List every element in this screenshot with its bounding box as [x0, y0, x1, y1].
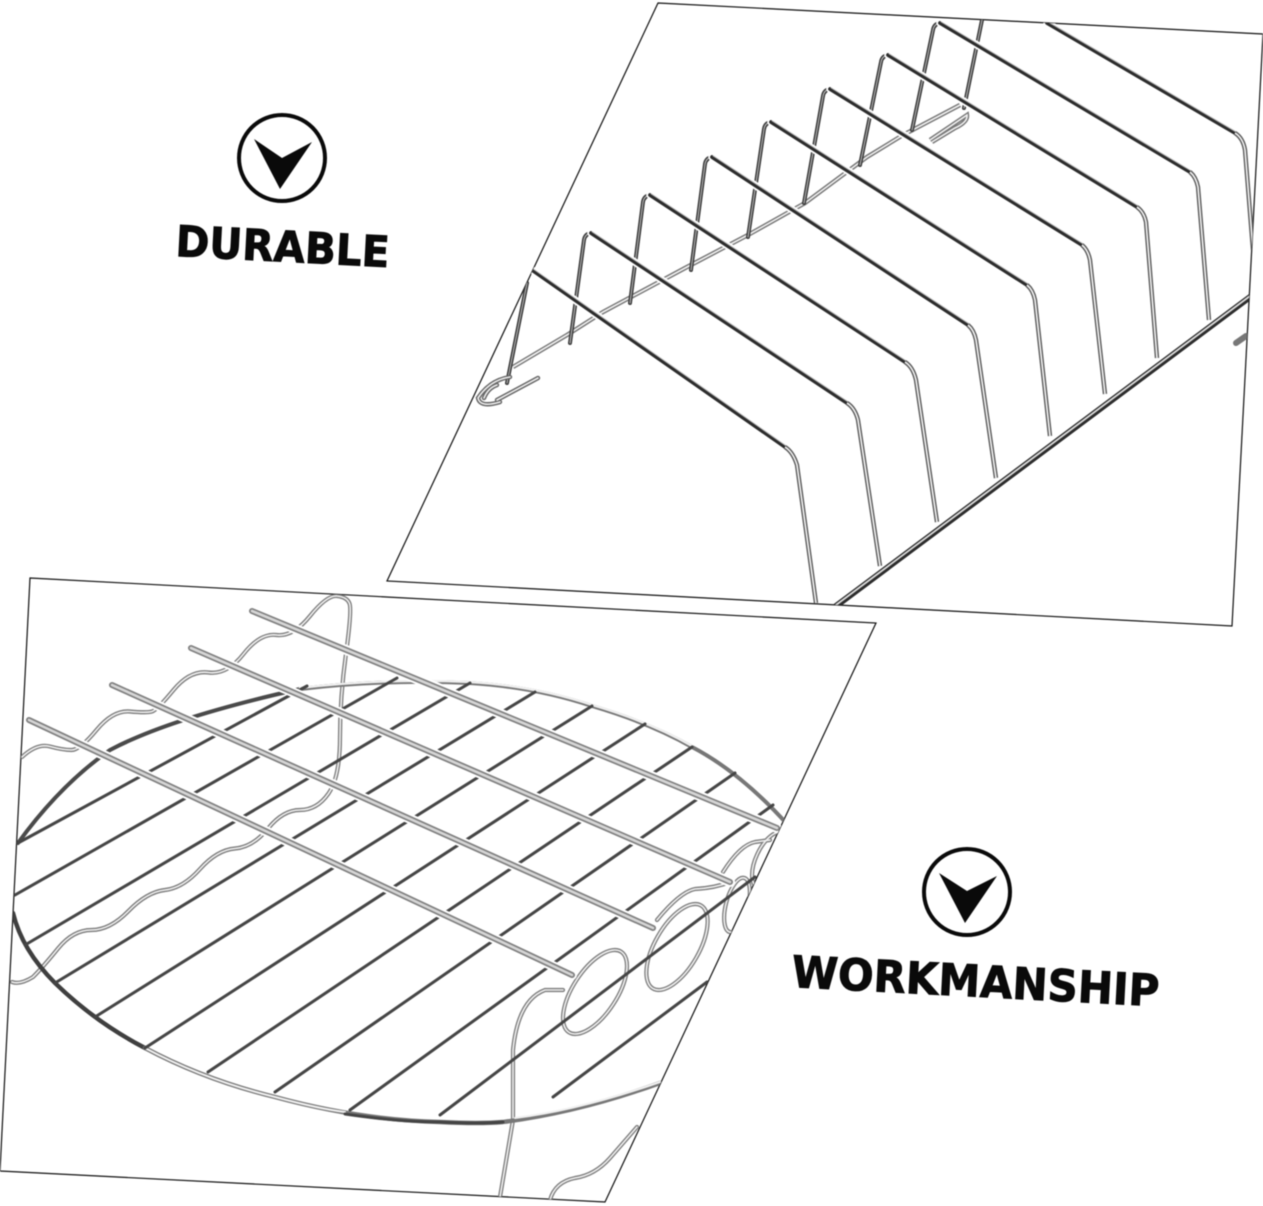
rack hook foot [478, 377, 538, 404]
panel: bottom round grill photo [0, 578, 876, 1202]
panel: top rack photo [387, 3, 1263, 626]
rack back legs [507, 20, 982, 383]
heading: workmanship: WORKMANSHIP [790, 947, 1161, 1017]
panel outline: grill photo frame [0, 578, 876, 1202]
feature callout: durable [174, 115, 391, 278]
rack front legs [785, 133, 1253, 603]
grill skewers [29, 611, 777, 975]
rack end stub [1236, 336, 1246, 343]
grill illustration: round rack with skewers [12, 596, 795, 1200]
grill wavy stand wires [12, 596, 795, 1200]
rack illustration: stainless wire rib rack [478, 20, 1253, 606]
icon: circled arrow workmanship [924, 849, 1010, 935]
icon: circled arrow durable [239, 115, 325, 201]
panel outline: rack photo frame [387, 3, 1263, 626]
feature callout: workmanship [790, 849, 1161, 1017]
rack back rail [513, 105, 967, 367]
heading: durable: DURABLE [174, 217, 391, 278]
rack slanted ribs [532, 22, 1236, 447]
rack front rail [836, 296, 1250, 606]
grill cross bars [15, 678, 773, 1115]
grill ring [13, 681, 787, 1123]
